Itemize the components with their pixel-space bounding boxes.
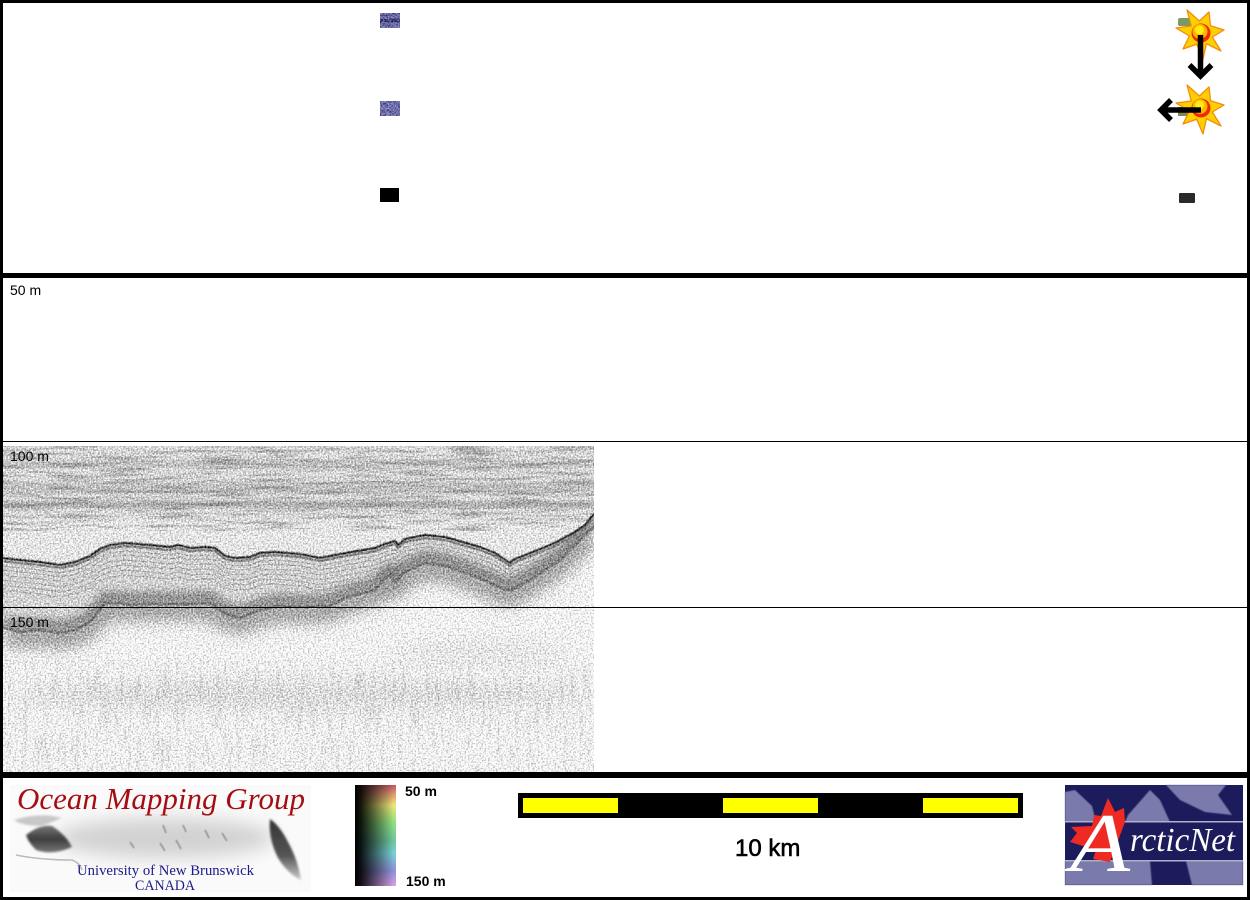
arrow: pointing down <box>1190 35 1212 76</box>
legend: depth colour bar <box>355 785 396 886</box>
panel: map strip with backscatter tiles and events <box>380 10 1224 203</box>
tile: blue backscatter middle <box>380 101 400 116</box>
panel: seismic profile <box>3 446 594 772</box>
logo: ArcticNet <box>1064 785 1243 890</box>
legend label: 150 m: 150 m <box>406 873 446 889</box>
arrow: pointing left <box>1161 100 1201 120</box>
logo band <box>1065 822 1243 861</box>
scale label: 10 km <box>735 835 800 862</box>
tile: blue backscatter top <box>380 13 400 28</box>
logo map land shapes <box>1065 785 1243 885</box>
legend label: 50 m: 50 m <box>405 783 437 799</box>
right vehicle shape <box>270 819 301 880</box>
logo university: University of New Brunswick <box>77 863 254 879</box>
logo wordmark: rcticNet <box>1130 822 1237 859</box>
water column <box>3 446 594 571</box>
tile: dark backscatter bottom right <box>1179 193 1195 203</box>
sediment layers <box>3 510 594 640</box>
icon: sunburst middle <box>1176 85 1224 134</box>
logo title: Ocean Mapping Group <box>17 781 305 816</box>
sub-bottom below basement <box>3 530 594 772</box>
logo: Ocean Mapping Group <box>14 789 304 890</box>
scale bar <box>518 793 1023 818</box>
logo country: CANADA <box>135 878 195 894</box>
depth gridlines <box>0 441 1250 608</box>
tile: green backscatter top right <box>1178 18 1191 26</box>
icon: sunburst top <box>1176 10 1224 59</box>
left vehicle shape <box>26 826 72 852</box>
depth label: 150 m: 150 m <box>10 614 49 630</box>
icon: maple leaf <box>1070 798 1125 862</box>
depth label: 100 m: 100 m <box>10 448 49 464</box>
tile: black backscatter bottom <box>380 188 399 202</box>
depth label: 50 m: 50 m <box>10 282 41 298</box>
logo capital A: A <box>1064 797 1131 890</box>
logo sonar backdrop <box>14 815 301 880</box>
